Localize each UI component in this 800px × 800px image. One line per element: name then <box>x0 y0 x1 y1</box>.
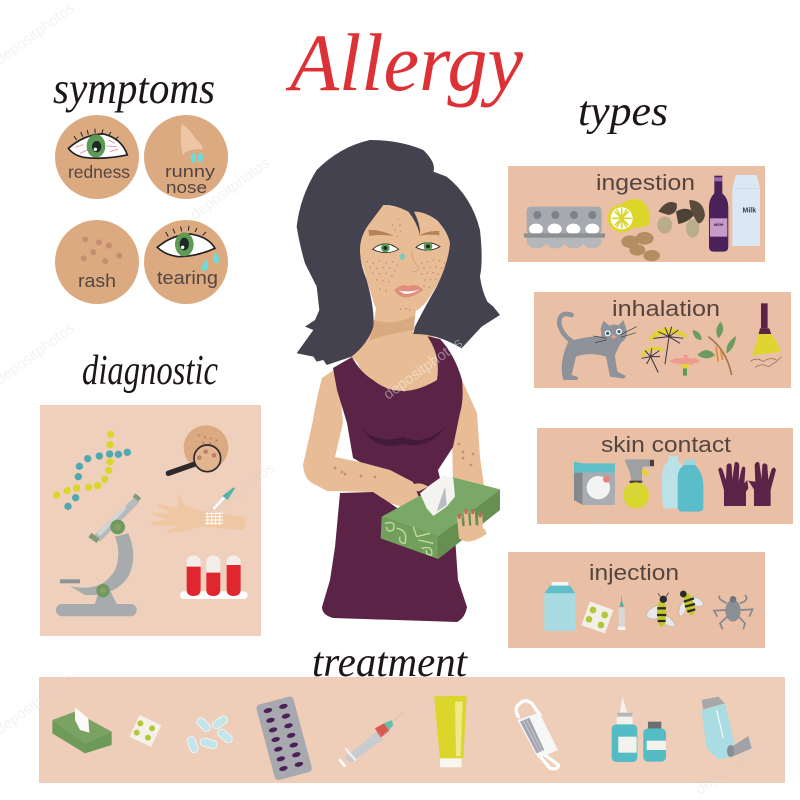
watermark: depositphotos <box>380 335 466 403</box>
panel: injection: injection <box>589 560 679 585</box>
panel: skin contact <box>537 428 793 524</box>
icon: blister pack <box>256 696 313 781</box>
woman: dress <box>322 336 467 622</box>
heading: treatment: treatment <box>312 640 468 686</box>
woman: arm rash <box>334 443 474 478</box>
icon: tissue box with tissue <box>381 475 500 559</box>
watermark: depositphotos <box>372 680 458 748</box>
icon: wine bottle <box>709 176 728 252</box>
icon: tick <box>714 595 753 629</box>
icon: egg carton <box>524 207 605 248</box>
symptom: runny nose: runny <box>165 162 216 181</box>
symptom: rash <box>55 220 139 304</box>
icon: ointment tube <box>434 696 467 767</box>
icon: flower <box>670 355 700 376</box>
heading: symptoms: symptoms <box>53 64 215 113</box>
woman: neck <box>352 303 428 380</box>
icon: capsules <box>186 714 234 754</box>
symptom: tearing: tearing <box>157 268 218 288</box>
panel: ingestion: ingestion <box>596 170 695 195</box>
icon: gloves <box>718 462 776 506</box>
icon: wine bottle: wine <box>713 222 724 227</box>
icon: inhaler <box>702 697 752 759</box>
icon: microscope <box>56 493 141 616</box>
icon: magnifier on skin <box>168 425 228 473</box>
icon: bees <box>646 591 704 627</box>
watermark: depositphotos <box>587 460 673 528</box>
symptom: tearing <box>144 220 228 304</box>
symptom: runny nose <box>144 115 228 199</box>
panel: ingestion <box>508 166 765 262</box>
icon: vaccine bottle <box>544 582 575 631</box>
icon: broom <box>750 303 782 367</box>
icon: pill pack <box>129 715 161 747</box>
icon: mushrooms <box>657 200 705 238</box>
woman: skin of arms and chest <box>303 330 484 514</box>
panel: inhalation <box>534 292 791 388</box>
heading: types: types <box>578 89 668 135</box>
icon: allergy test arm <box>152 493 245 533</box>
icon: syringe <box>339 712 403 767</box>
icon: milk carton: Milk <box>743 208 756 215</box>
figure: woman with allergy <box>297 140 500 622</box>
icon: peanuts <box>621 232 660 261</box>
icon: lemon <box>608 199 650 232</box>
symptom: redness: redness <box>68 162 130 182</box>
symptom: redness <box>55 115 139 199</box>
icon: spray bottle <box>623 459 654 508</box>
woman: right hand <box>458 510 487 542</box>
symptom: runny nose: nose <box>166 179 207 197</box>
icon: dropper <box>214 487 235 508</box>
watermark: depositphotos <box>692 730 778 798</box>
icon: syringe vial <box>618 597 625 630</box>
panel: diagnostic <box>40 405 261 636</box>
icon: cleaning bottles <box>662 456 703 512</box>
watermark: depositphotos <box>187 155 273 223</box>
panel: injection <box>508 552 765 648</box>
symptom: rash: rash <box>78 271 116 291</box>
watermark: depositphotos <box>192 460 278 528</box>
icon: milk carton <box>732 175 760 246</box>
icon: nasal spray bottles <box>612 697 666 762</box>
title: Allergy <box>285 17 524 108</box>
icon: branch <box>693 322 736 375</box>
icon: pill pack <box>581 602 613 634</box>
icon: face mask <box>516 701 558 769</box>
panel: symptoms <box>55 115 228 304</box>
icon: detergent box <box>574 462 615 505</box>
panel: treatment <box>39 677 785 783</box>
icon: blood test tubes <box>180 556 248 599</box>
icon: cat <box>559 314 637 380</box>
icon: DNA <box>53 431 131 510</box>
woman: hair <box>297 140 500 365</box>
panel: skin contact: skin contact <box>601 432 731 457</box>
heading: diagnostic: diagnostic <box>82 348 218 394</box>
panel: inhalation: inhalation <box>612 296 720 321</box>
icon: tissue box <box>52 707 112 753</box>
woman: face <box>359 205 451 316</box>
icon: dandelion plants <box>642 327 687 373</box>
